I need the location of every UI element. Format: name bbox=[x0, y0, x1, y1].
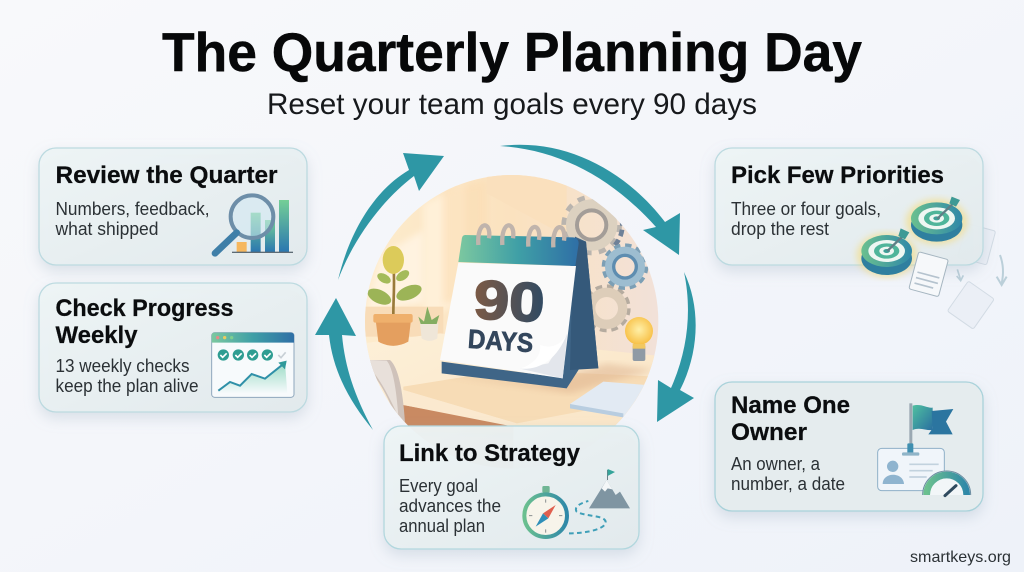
text: review: what shipped bbox=[55, 219, 158, 239]
calendar days label: DAYS bbox=[467, 324, 534, 358]
central illustration: 90 days calendar on desk bbox=[365, 175, 658, 426]
text: name one owner: number, a date bbox=[731, 474, 845, 494]
heading: pick few: Pick Few Priorities bbox=[731, 162, 944, 189]
panel: check progress weekly bbox=[39, 283, 307, 412]
arrow: top right bbox=[500, 145, 680, 255]
text: review bbox=[55, 199, 209, 239]
bulb bbox=[625, 317, 653, 345]
text: pick few: Three or four goals, bbox=[731, 199, 881, 219]
icon: flag, badge and gauge bbox=[878, 403, 971, 496]
heading: review: Review the Quarter bbox=[56, 162, 278, 189]
icon: compass and mountain bbox=[524, 469, 630, 537]
heading: name one owner: Owner bbox=[731, 419, 807, 446]
text: name one owner bbox=[731, 454, 845, 494]
footer: source: smartkeys.org bbox=[910, 549, 1011, 566]
calendar stand bbox=[442, 237, 598, 388]
panel: name one owner bbox=[715, 382, 983, 511]
icon: magnifier and bars bbox=[215, 195, 293, 253]
plant bbox=[365, 246, 439, 346]
text: link to strategy: advances the bbox=[399, 496, 501, 516]
text: link to strategy bbox=[399, 476, 501, 536]
text: check progress: 13 weekly checks bbox=[56, 356, 190, 376]
heading: link to strategy: Link to Strategy bbox=[399, 440, 580, 467]
text: pick few bbox=[731, 199, 881, 239]
text: link to strategy: Every goal bbox=[399, 476, 478, 496]
text: check progress bbox=[56, 356, 198, 396]
panel: link to strategy bbox=[384, 426, 639, 549]
faded documents bbox=[947, 223, 1007, 329]
title: The Quarterly Planning Day bbox=[162, 21, 862, 83]
panel: pick few priorities bbox=[715, 148, 1007, 329]
text: name one owner: An owner, a bbox=[731, 454, 821, 474]
subtitle: Reset your team goals every 90 days bbox=[267, 88, 757, 121]
heading: name one owner: Name One bbox=[731, 392, 850, 419]
arrow: left bbox=[315, 298, 373, 430]
heading: check progress: Check Progress bbox=[56, 295, 234, 322]
text: review: Numbers, feedback, bbox=[56, 199, 210, 219]
heading: name one owner bbox=[731, 392, 850, 446]
gears bbox=[565, 198, 645, 329]
heading: check progress: Weekly bbox=[56, 322, 138, 349]
heading: check progress bbox=[56, 295, 234, 349]
calendar number: 90 bbox=[472, 268, 546, 334]
arrow: top left bbox=[338, 153, 444, 280]
text: check progress: keep the plan alive bbox=[56, 376, 198, 396]
arrow: right bbox=[657, 272, 696, 422]
text: pick few: drop the rest bbox=[731, 219, 829, 239]
panel: review the quarter bbox=[39, 148, 307, 265]
icon: dashboard window bbox=[212, 333, 294, 397]
icon: targets and papers bbox=[857, 197, 967, 297]
notebook bbox=[570, 382, 647, 417]
text: link to strategy: annual plan bbox=[399, 516, 485, 536]
calendar header bbox=[458, 235, 579, 266]
calendar page bbox=[440, 263, 576, 378]
calendar rings bbox=[478, 225, 564, 247]
